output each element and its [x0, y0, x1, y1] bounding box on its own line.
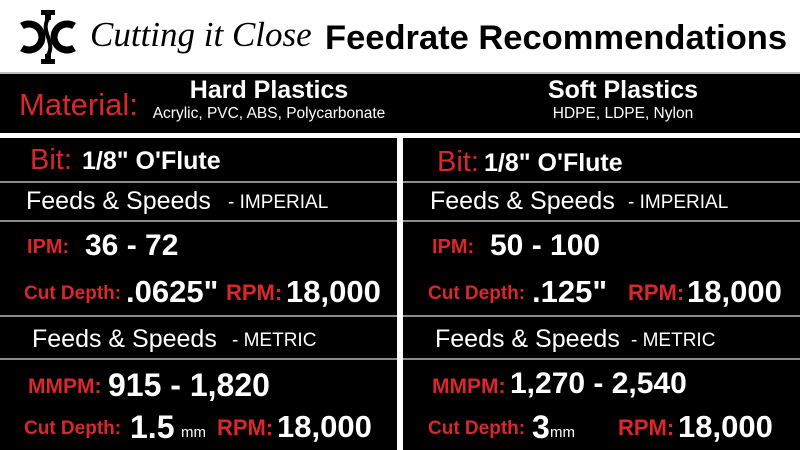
- imperial heading: [26, 187, 328, 215]
- metric heading: - METRIC: [232, 330, 316, 351]
- metric heading: Feeds & Speeds: [32, 325, 217, 353]
- bit: Bit:: [30, 144, 72, 176]
- material label: Material:: [19, 87, 138, 122]
- imperial heading: - IMPERIAL: [628, 192, 728, 213]
- ipm: 50 - 100: [490, 229, 600, 262]
- bit: Bit:: [437, 146, 479, 178]
- bit: 1/8" O'Flute: [484, 149, 623, 177]
- cut depth imperial: .125": [532, 274, 607, 309]
- title: Feedrate Recommendations: [325, 19, 787, 57]
- ipm: IPM:: [432, 236, 474, 258]
- imperial heading: Feeds & Speeds: [26, 187, 211, 215]
- cut depth imperial: Cut Depth:: [24, 283, 121, 304]
- cut depth metric: 1.5: [130, 409, 174, 445]
- imperial heading: - IMPERIAL: [228, 192, 328, 213]
- metric heading: - METRIC: [631, 330, 715, 351]
- metric heading: Feeds & Speeds: [435, 325, 620, 353]
- metric heading: [435, 325, 715, 353]
- hard plastics: Acrylic, PVC, ABS, Polycarbonate: [153, 105, 385, 122]
- cut depth metric: RPM:: [618, 415, 674, 440]
- cut depth metric: [24, 409, 372, 445]
- panel: material: [0, 74, 800, 133]
- cut depth imperial: RPM:: [226, 280, 282, 305]
- soft plastics: HDPE, LDPE, Nylon: [553, 105, 693, 122]
- mmpm: MMPM:: [28, 375, 101, 398]
- panel: hard plastics: [0, 138, 397, 450]
- ipm: [27, 229, 178, 262]
- mmpm: 1,270 - 2,540: [510, 367, 687, 400]
- cut depth imperial: [24, 274, 381, 309]
- panel: soft plastics: [403, 138, 800, 450]
- cut depth metric: 18,000: [678, 409, 773, 444]
- ipm: 36 - 72: [85, 229, 178, 262]
- ipm: [432, 229, 600, 262]
- ipm: IPM:: [27, 236, 69, 258]
- soft plastics: [548, 76, 698, 122]
- bit: [30, 144, 221, 176]
- mmpm: [28, 367, 270, 403]
- cut depth metric: mm: [550, 424, 575, 441]
- mmpm: [432, 367, 687, 400]
- hard plastics: [152, 76, 385, 122]
- cut depth metric: Cut Depth:: [24, 418, 121, 439]
- cut depth imperial: Cut Depth:: [428, 283, 525, 304]
- icon: logo: [20, 10, 76, 64]
- imperial heading: [430, 187, 728, 215]
- cut depth imperial: 18,000: [687, 274, 782, 309]
- bit: 1/8" O'Flute: [82, 147, 221, 175]
- cut depth imperial: [428, 274, 782, 309]
- bit: [437, 146, 623, 178]
- hard plastics: Hard Plastics: [190, 76, 348, 104]
- cut depth metric: Cut Depth:: [428, 418, 525, 439]
- cut depth metric: 18,000: [277, 409, 372, 444]
- cut depth imperial: .0625": [126, 274, 218, 309]
- cut depth metric: [428, 409, 773, 445]
- cut depth metric: mm: [181, 424, 206, 441]
- soft plastics: Soft Plastics: [548, 76, 698, 104]
- cut depth metric: 3: [532, 409, 550, 445]
- cut depth metric: RPM:: [217, 415, 273, 440]
- imperial heading: Feeds & Speeds: [430, 187, 615, 215]
- cut depth imperial: RPM:: [628, 280, 684, 305]
- header: [0, 0, 800, 74]
- brand name: Cutting it Close: [90, 15, 312, 54]
- mmpm: 915 - 1,820: [108, 367, 270, 403]
- cut depth imperial: 18,000: [286, 274, 381, 309]
- metric heading: [32, 325, 316, 353]
- mmpm: MMPM:: [432, 375, 505, 398]
